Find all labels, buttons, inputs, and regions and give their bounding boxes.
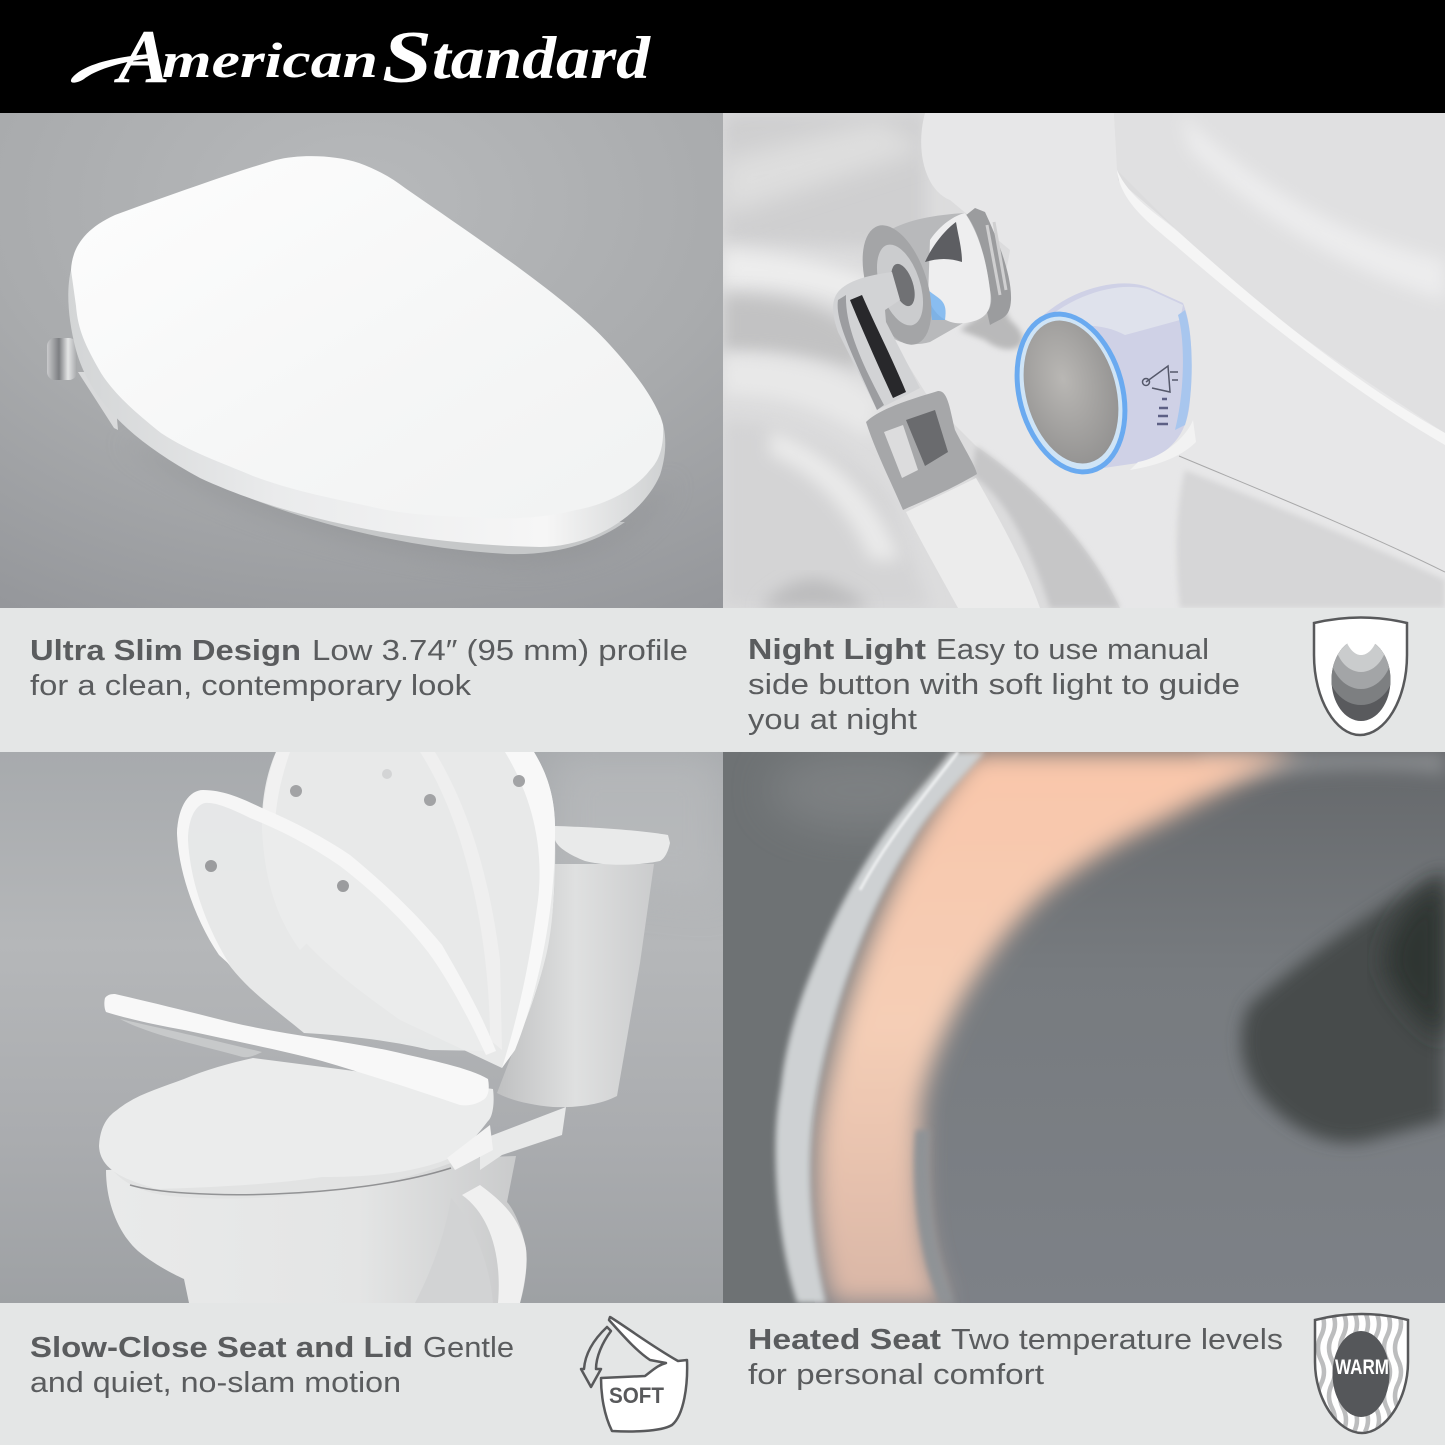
- logo: American Standard: S: [382, 17, 432, 99]
- icon: warm shield: WARM: [1335, 1356, 1389, 1379]
- lid fully open: [262, 752, 555, 1068]
- closed seat lower ring: [419, 1159, 450, 1172]
- text: night light: side button with soft light to guide: [748, 669, 1240, 701]
- bowl outlet: [1241, 870, 1445, 1143]
- white hose: [906, 478, 1040, 608]
- text: heated seat: Heated Seat: [748, 1324, 941, 1356]
- closed seat: [99, 1058, 494, 1189]
- text: ultra slim design: [30, 635, 688, 702]
- chrome elbow pipe: [833, 272, 920, 410]
- seat lid: [71, 156, 663, 519]
- header bar with logo: [0, 0, 1445, 113]
- logo: American Standard: merican: [162, 32, 378, 88]
- top right rim: [1214, 752, 1445, 782]
- icon: night light shield: [1314, 600, 1407, 735]
- panel: slow-close seat photo: [0, 752, 723, 1303]
- hinge bracket and button: [47, 338, 118, 430]
- warm glow band: [816, 752, 1300, 1303]
- text: slow-close seat and lid: [30, 1332, 514, 1399]
- lid mid position: [177, 802, 464, 1050]
- logo: American Standard: A: [114, 15, 170, 99]
- icon: warm shield: [1315, 1312, 1408, 1433]
- bowl interior: [812, 941, 1445, 1303]
- panel: heated seat photo: [723, 750, 1445, 1303]
- text: slow-close seat and lid: and quiet, no-slam motion: [30, 1367, 401, 1399]
- seat shadow: [236, 494, 452, 550]
- lid streak highlights: [1194, 136, 1441, 292]
- chrome ferrule: [866, 391, 977, 510]
- panel: night light photo: [723, 113, 1445, 608]
- icon: soft close: SOFT: [609, 1383, 665, 1408]
- toilet tank: [497, 826, 670, 1107]
- caption strip: row 1: [30, 616, 1408, 736]
- wall glow spot: [782, 754, 928, 826]
- panel: ultra slim seat photo: [0, 113, 723, 608]
- text: night light: Easy to use manual: [936, 634, 1209, 666]
- text: slow-close seat and lid: Slow-Close Seat and Lid: [30, 1332, 413, 1364]
- text: night light: you at night: [748, 704, 917, 736]
- seat underside lip: [248, 498, 625, 554]
- lid near closed: [104, 994, 489, 1105]
- lid bright edge: [1117, 170, 1445, 445]
- icon: soft close: [581, 1317, 687, 1431]
- seat side band: [68, 270, 665, 547]
- text: slow-close seat and lid: Gentle: [423, 1332, 514, 1364]
- left wall and bowl soft shading: [723, 113, 930, 608]
- logo: American Standard: tandard: [432, 25, 651, 91]
- rim: [776, 752, 985, 1303]
- text: ultra slim design: Low 3.74″ (95 mm) profile: [312, 635, 688, 667]
- lid hinge dots: [290, 769, 525, 806]
- bowl inner ring: [914, 1130, 955, 1303]
- text: heated seat: [748, 1324, 1283, 1391]
- toilet bowl: [106, 1156, 527, 1303]
- seat lower right: [1177, 470, 1445, 608]
- bowl inner shadow: [972, 446, 1120, 608]
- control panel: [447, 1125, 493, 1170]
- illuminated side button: [1014, 284, 1196, 474]
- text: night light: [748, 634, 1240, 736]
- text: ultra slim design: Ultra Slim Design: [30, 635, 301, 667]
- seat lid above edge: [1114, 113, 1445, 433]
- text: heated seat: for personal comfort: [748, 1359, 1044, 1391]
- text: ultra slim design: for a clean, contemporary look: [30, 670, 472, 702]
- tank bracket: [480, 1107, 566, 1170]
- text: night light: Night Light: [748, 634, 926, 666]
- main porcelain: [880, 113, 1445, 608]
- threaded nipple: [965, 208, 1011, 325]
- chrome nut: [862, 213, 992, 345]
- logo: American Standard: [71, 15, 651, 99]
- text: heated seat: Two temperature levels: [951, 1324, 1283, 1356]
- caption strip: row 2: [0, 1303, 1445, 1445]
